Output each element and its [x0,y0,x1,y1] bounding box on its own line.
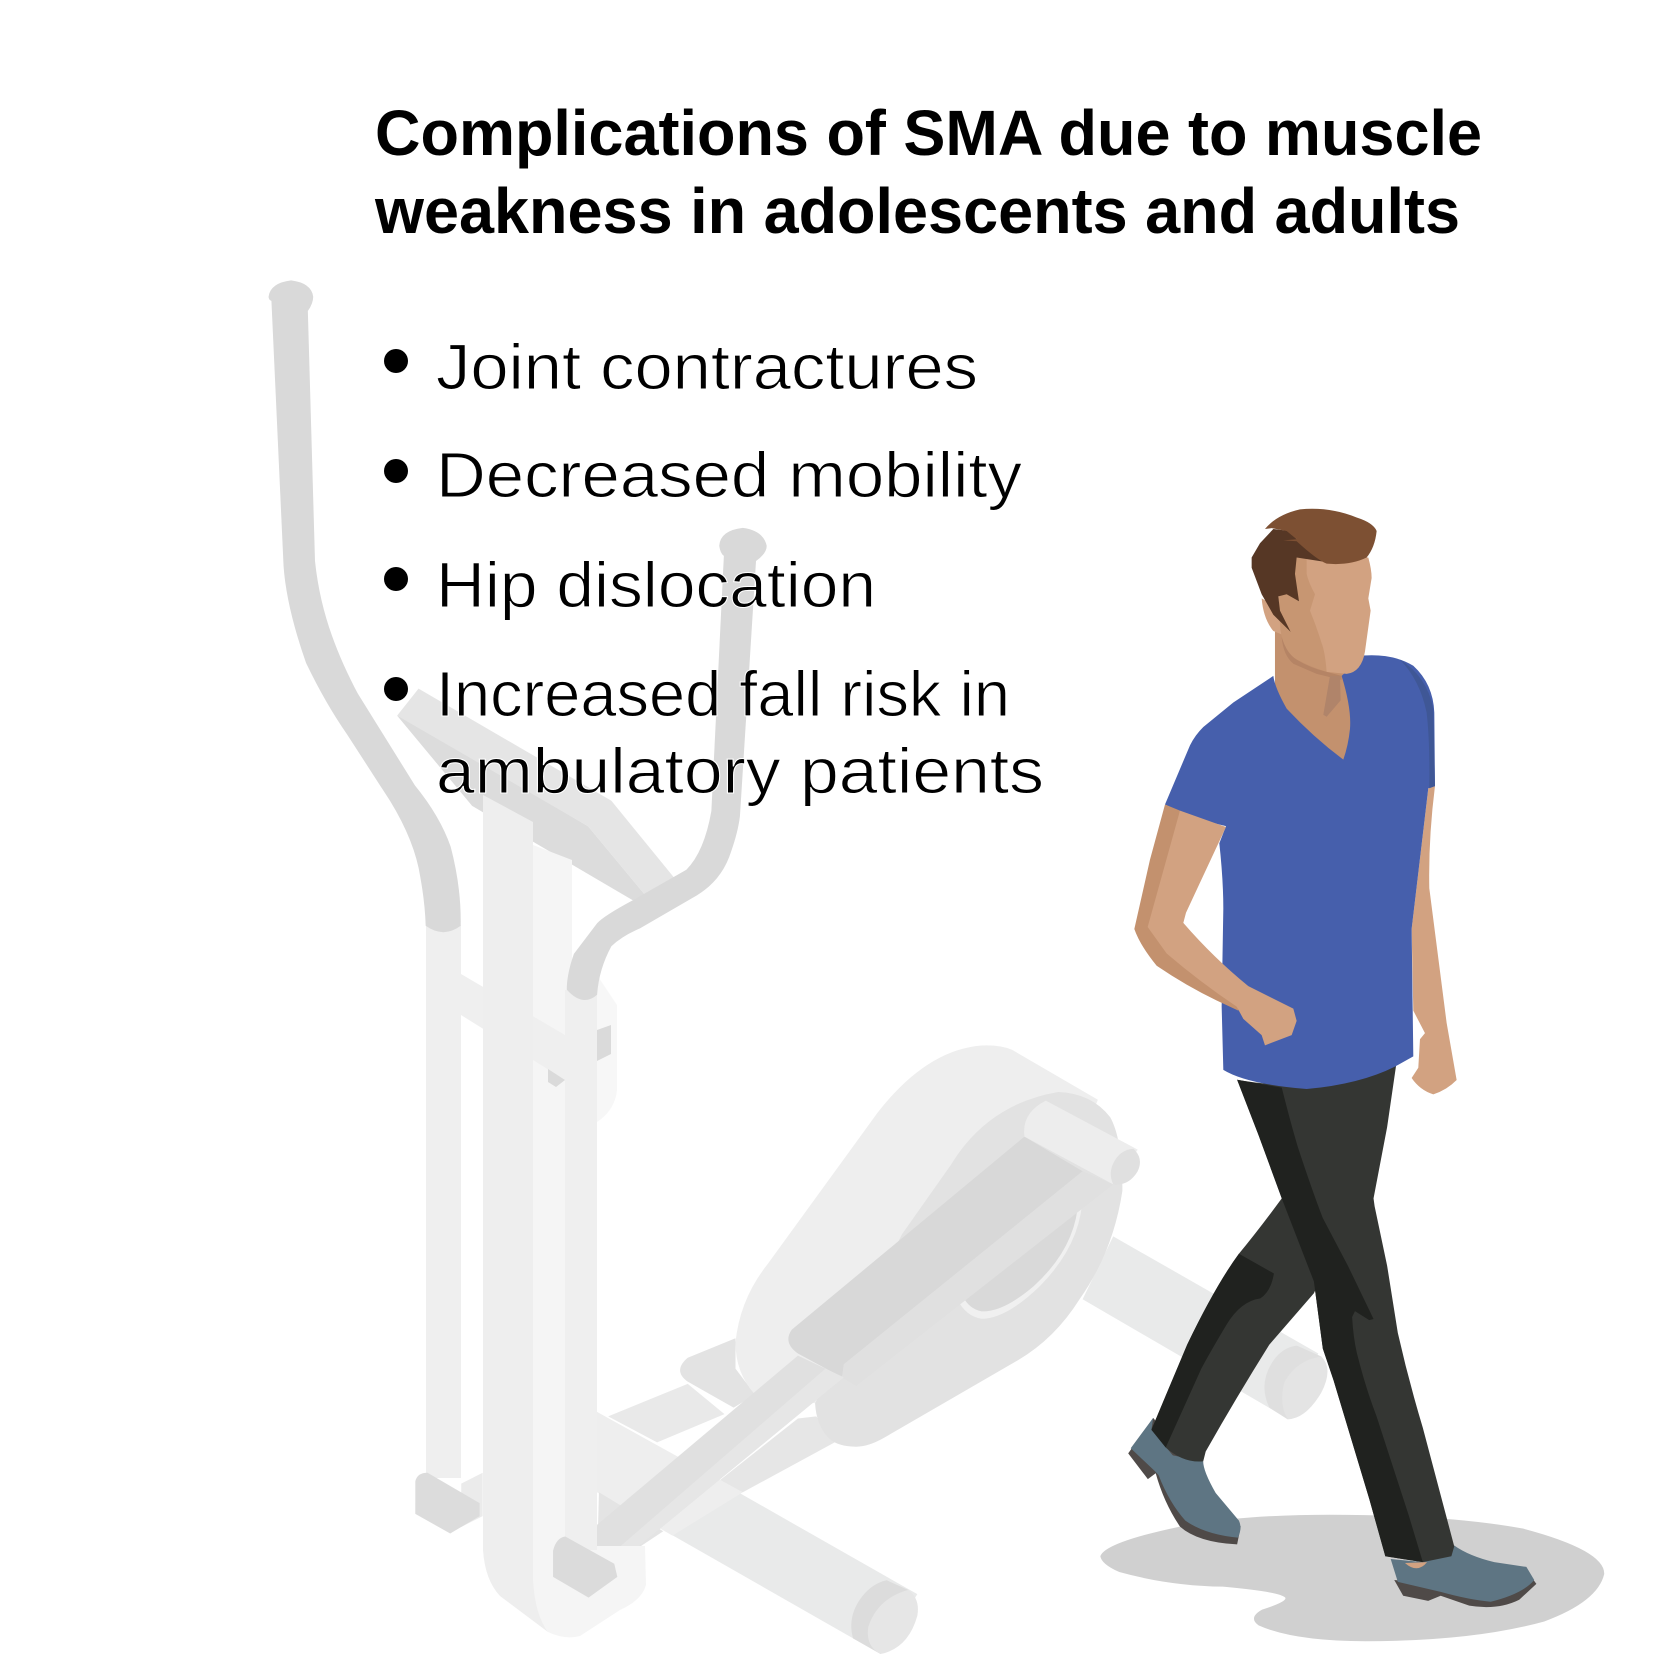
flywheel inner disc [957,1193,1083,1319]
bullet: decreased mobility: Decreased mobility [436,439,1022,511]
front leg [1237,1066,1454,1562]
handles [269,280,767,1000]
face shadow [1278,558,1333,672]
t-shirt [1165,655,1435,1089]
ear [1262,598,1283,635]
front upright rod [565,990,597,1550]
flywheel housing back [735,1045,1098,1403]
far arm [1412,786,1457,1094]
title: Complications of SMA due to muscle [375,97,1482,169]
rear link bars [608,1384,724,1442]
bullet: increased fall risk: ambulatory patients [436,735,1044,807]
neck [1275,631,1360,774]
center column band [483,795,548,1632]
center column light band [533,845,646,1637]
near arm [1134,805,1297,1045]
rear shoe [1128,1418,1241,1544]
elliptical trainer illustration [269,280,1327,1654]
title: weakness in adolescents and adults [374,175,1460,247]
left upright rod [426,925,461,1478]
rear roller end [1264,1346,1321,1419]
trainer lower frame and flywheel [461,1045,1327,1654]
jaw line [1282,637,1342,680]
left handle [269,280,461,932]
torso and head [1134,509,1457,1094]
flywheel housing front [815,1092,1122,1447]
top roller [1024,1101,1138,1184]
front stabilizer bar [597,1412,917,1654]
uprights [426,795,646,1637]
bullet: joint contractures: Joint contractures [436,331,978,403]
right handle [567,528,767,1000]
pedal rail [596,1356,844,1564]
face [1307,558,1372,674]
left foot connector [461,1473,483,1527]
rear stabilizer bar [1083,1236,1318,1419]
cross bar [461,974,565,1080]
bullet: increased fall risk: Increased fall risk in [436,658,1010,730]
foot pedals [415,1473,617,1598]
rear housing behind rod [597,975,617,1122]
light hair [1265,509,1377,564]
console panel [397,689,674,900]
drive cover panel [788,1137,1083,1377]
shirt shoulder shading [1400,660,1435,788]
dark hair [1252,529,1323,632]
title [374,97,1482,247]
front roller end [851,1580,908,1654]
rear leg [1151,1198,1330,1462]
right pedal [553,1536,617,1598]
front shoe [1391,1546,1536,1607]
lower connector [597,1492,663,1564]
walking man [1128,509,1536,1607]
legs and shoes [1128,1066,1536,1607]
neck shadow [1323,676,1341,717]
brackets [597,1025,611,1061]
bullet: hip dislocation: Hip dislocation [436,549,876,621]
floor shadow [1100,1515,1604,1641]
bullet list [384,331,1044,807]
bullet: increased fall risk [384,658,1044,807]
left pedal [415,1473,480,1533]
